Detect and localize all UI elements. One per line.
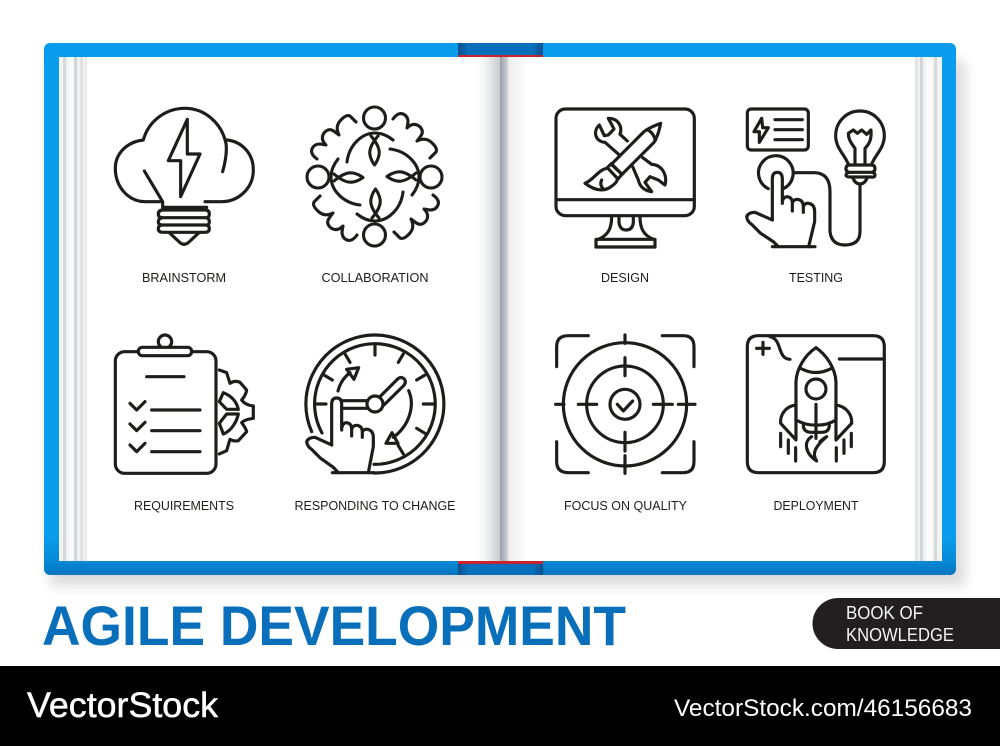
label: responding to change: RESPONDING TO CHANGE	[294, 498, 456, 513]
book	[44, 43, 965, 586]
label: design: DESIGN	[601, 270, 649, 285]
right page edges	[915, 57, 942, 561]
badge: book of knowledge: BOOK OF	[846, 602, 923, 623]
spine band top	[458, 43, 543, 57]
label: collaboration: COLLABORATION	[322, 270, 428, 285]
label: testing: TESTING	[789, 270, 843, 285]
footer bar: VectorStock.com/46156683	[674, 695, 972, 722]
left page edges	[59, 57, 87, 561]
label: deployment: DEPLOYMENT	[774, 498, 859, 513]
pages	[59, 57, 942, 561]
icon: testing	[747, 109, 884, 247]
title: AGILE DEVELOPMENT	[42, 594, 626, 657]
spine band bottom	[458, 561, 543, 575]
spine shadow	[472, 57, 528, 561]
footer bar: VectorStock	[27, 686, 219, 725]
icon: requirements	[115, 335, 253, 473]
icon: collaboration	[307, 107, 442, 246]
icon: brainstorm	[115, 108, 253, 244]
book cover	[44, 43, 956, 575]
icon: responding to change	[306, 335, 444, 473]
label: focus on quality: FOCUS ON QUALITY	[564, 498, 687, 513]
label: requirements: REQUIREMENTS	[134, 498, 234, 513]
footer bar	[0, 666, 1000, 746]
icon: deployment	[747, 336, 884, 473]
badge: book of knowledge	[813, 598, 1000, 649]
label: brainstorm: BRAINSTORM	[142, 270, 226, 285]
icon: design	[556, 109, 694, 247]
badge: book of knowledge: KNOWLEDGE	[846, 624, 954, 645]
icon: focus on quality	[556, 335, 695, 473]
